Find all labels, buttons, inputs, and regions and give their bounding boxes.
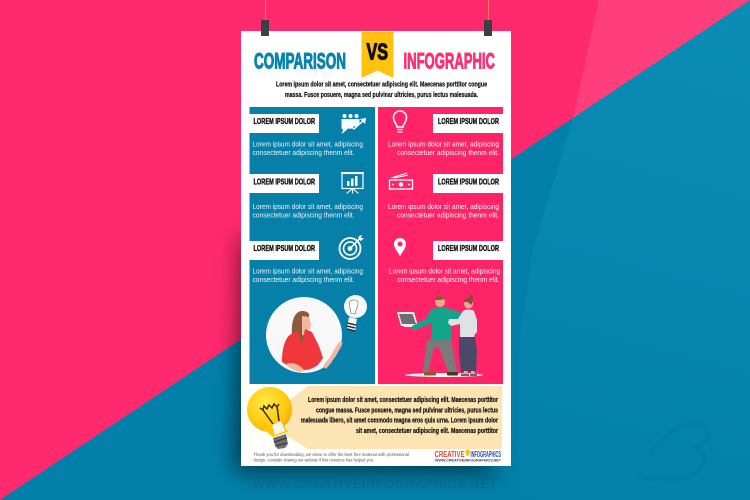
row 3 heading: LOREM IPSUM DOLOR (254, 243, 315, 253)
icon: team growth (342, 114, 366, 133)
row 3 text (252, 266, 363, 284)
panel: left blue (250, 107, 375, 384)
poster shadow (234, 230, 498, 473)
row 3 text: consectetuer adipiscing thenm elit. (398, 275, 500, 284)
callout: beige text arrow (287, 386, 502, 449)
illustration: two people with laptop (397, 295, 483, 377)
vs ribbon: VS (366, 38, 388, 64)
row 2 heading: LOREM IPSUM DOLOR (254, 176, 315, 186)
intro text (276, 80, 487, 99)
row 3 heading: LOREM IPSUM DOLOR (438, 243, 499, 253)
row 1 text: Lorem ipsum dolor sit amet, adipiscing (252, 140, 363, 148)
row 2 text: Lorem ipsum dolor sit amet, adipiscing (252, 202, 363, 211)
callout text: sit amet, consectetuer adipiscing elit. Maecenas porttitor (356, 426, 498, 435)
logo: creative infographics: INFOGRAPHICS (470, 450, 501, 459)
intro text: Lorem ipsum dolor sit amet, consectetuer adipiscing elit. Maecenas porttitor congue (276, 80, 487, 88)
hanging clip right (484, 0, 492, 36)
watermark url: WWW.CREATIVEINFOGRAPHICS.NET (253, 477, 497, 491)
title: infographic: INFOGRAPHIC (404, 48, 495, 74)
row 1 text: consectetuer adipiscing thenm elit. (397, 148, 499, 157)
logo: creative infographics: CREATIVE (434, 450, 465, 459)
icon: target (340, 235, 364, 259)
intro text: massa. Fusce posuere, magna sed pulvinar ultricies, purus lectus malesuada. (285, 90, 478, 99)
illustration: woman in circle (266, 297, 343, 373)
logo: creative infographics (434, 450, 502, 462)
illustration: idea bulb (344, 295, 367, 331)
title: comparison: COMPARISON (254, 48, 346, 74)
panel: right pink (378, 107, 503, 384)
callout text: congue massa. Fusce posuere, magna sed pulvinar ultricies, purus lectus (316, 406, 498, 414)
row 2 heading: LOREM IPSUM DOLOR (438, 176, 499, 186)
row 1 text: consectetuer adipiscing thenm elit. (252, 148, 354, 157)
row 2 heading (250, 174, 319, 193)
row 3 heading (250, 241, 319, 260)
row 3 text: Lorem ipsum dolor sit amet, adipiscing (252, 266, 363, 276)
vs ribbon (362, 32, 394, 78)
icon: lightbulb (394, 111, 406, 132)
row 1 heading: LOREM IPSUM DOLOR (438, 116, 499, 126)
row 3 text (389, 266, 500, 284)
footer note: design, consider sharing our website if this resource has helped you. (254, 458, 374, 462)
row 2 heading (433, 174, 503, 193)
row 1 text (388, 140, 499, 157)
footer note (254, 452, 409, 462)
callout text: malesuada libero, sit amet commodo magna eros quis urna. Lorem ipsum dolor (301, 416, 498, 424)
hanging clip left (261, 0, 269, 36)
row 2 text: consectetuer adipiscing thenm elit. (252, 210, 354, 220)
footer note: Thank you for downloading, we strive to offer the best free material with professional (254, 452, 409, 457)
icon: presentation board (341, 172, 364, 194)
row 3 text: consectetuer adipiscing thenm elit. (252, 275, 354, 284)
row 1 heading (433, 114, 503, 133)
icon: banknotes (390, 173, 412, 189)
row 3 text: Lorem ipsum dolor sit amet, adipiscing (389, 266, 500, 276)
row 1 text: Lorem ipsum dolor sit amet, adipiscing (388, 140, 499, 148)
row 1 heading: LOREM IPSUM DOLOR (254, 116, 315, 126)
poster sheet (241, 31, 511, 466)
row 1 heading (250, 114, 319, 133)
row 1 text (252, 140, 363, 157)
row 2 text (252, 202, 363, 220)
logo: creative infographics: WWW.CREATIVEINFOGRAPHICS.NET (435, 458, 502, 462)
callout text: Lorem ipsum dolor sit amet, consectetuer adipiscing elit. Maecenas porttitor (308, 395, 498, 404)
row 2 text (388, 202, 499, 220)
icon: map pin (394, 238, 406, 256)
row 2 text: consectetuer adipiscing thenm elit. (397, 210, 499, 220)
callout text (301, 395, 498, 435)
icon: big yellow lightbulb (247, 387, 292, 449)
row 2 text: Lorem ipsum dolor sit amet, adipiscing (388, 202, 499, 211)
row 3 heading (433, 241, 503, 260)
